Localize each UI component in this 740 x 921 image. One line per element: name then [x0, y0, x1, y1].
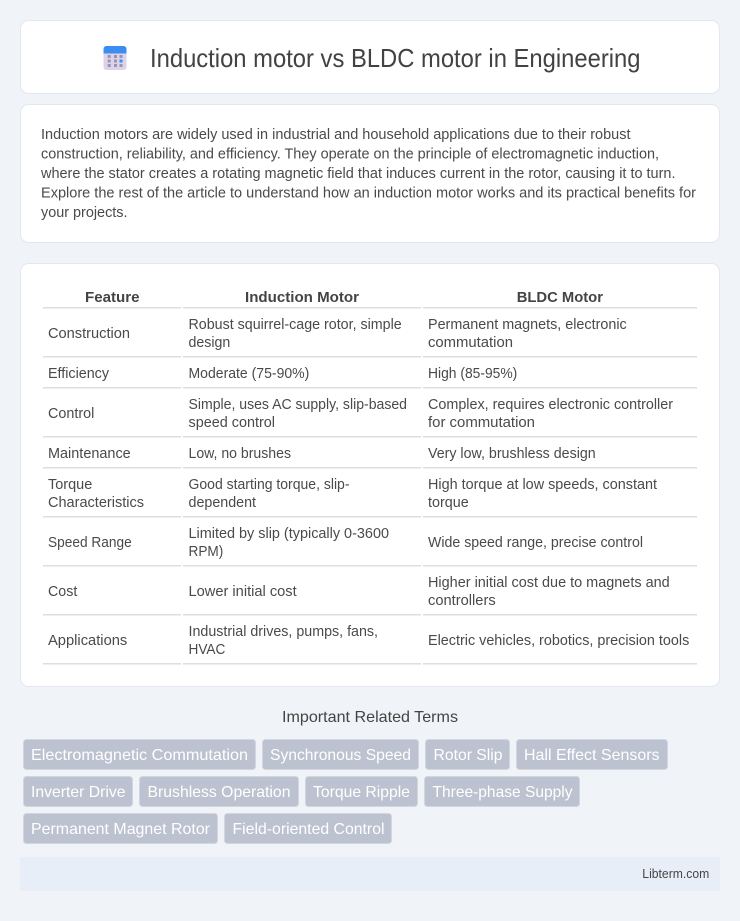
- chip: Electromagnetic Commutation: [24, 740, 256, 770]
- icon: calendar: [104, 46, 126, 70]
- row: speed range: Wide speed range, precise control: [428, 535, 643, 551]
- row: construction: [48, 317, 627, 351]
- row: construction: commutation: [428, 335, 513, 351]
- chip: Synchronous Speed: Synchronous Speed: [270, 747, 411, 764]
- title: Induction motor vs BLDC motor in Engineering: [150, 45, 640, 73]
- row: applications: Electric vehicles, robotics, precision tools: [428, 633, 689, 649]
- heading: important related terms: Important Related Terms: [282, 709, 458, 726]
- related term chips: [24, 740, 668, 844]
- intro paragraph: where the stator creates a rotating magnetic field that induces current in the rotor, causing it to turn.: [40, 166, 675, 182]
- chip: Field-oriented Control: [224, 814, 392, 844]
- row: torque characteristics: dependent: [188, 495, 256, 511]
- chip: Hall Effect Sensors: Hall Effect Sensors: [524, 747, 660, 764]
- table header: BLDC Motor: [517, 289, 603, 306]
- chip: Torque Ripple: [306, 776, 418, 806]
- row: torque characteristics: High torque at low speeds, constant: [428, 477, 657, 493]
- chip: Three-phase Supply: [424, 776, 580, 806]
- chip: Brushless Operation: Brushless Operation: [148, 784, 290, 801]
- row: control: [48, 397, 673, 431]
- row: speed range: [48, 526, 643, 560]
- chip: Three-phase Supply: Three-phase Supply: [432, 784, 572, 801]
- row: control: Simple, uses AC supply, slip-based: [188, 397, 407, 413]
- chip: Field-oriented Control: Field-oriented Control: [232, 821, 384, 838]
- row: efficiency: [48, 366, 517, 382]
- row: speed range: RPM): [188, 544, 223, 560]
- row: maintenance: Very low, brushless design: [428, 446, 596, 462]
- row: applications: [48, 624, 689, 658]
- footer: [20, 857, 720, 891]
- row: cost: controllers: [428, 593, 496, 609]
- row: maintenance: Maintenance: [48, 446, 131, 462]
- row: torque characteristics: Torque: [48, 477, 92, 493]
- chip: Electromagnetic Commutation: Electromagnetic Commutation: [31, 747, 248, 764]
- footer credit: Libterm.com: [642, 866, 709, 881]
- row: applications: Industrial drives, pumps, fans,: [188, 624, 378, 640]
- intro paragraph: Explore the rest of the article to understand how an induction motor works and its practical benefits for: [41, 186, 696, 202]
- table header: [85, 289, 603, 306]
- row: applications: Applications: [48, 633, 127, 649]
- row: speed range: Speed Range: [48, 534, 132, 551]
- row: efficiency: Efficiency: [48, 366, 110, 382]
- panel: title header: [20, 20, 720, 94]
- panel: comparison table: [20, 264, 720, 686]
- chip: Inverter Drive: [24, 776, 132, 806]
- row: efficiency: Moderate (75-90%): [188, 366, 309, 382]
- row: construction: Robust squirrel-cage rotor, simple: [188, 317, 402, 333]
- row: speed range: Limited by slip (typically 0-3600: [188, 526, 389, 542]
- intro paragraph: Induction motors are widely used in industrial and household applications due to their robust: [41, 127, 630, 143]
- chip: Hall Effect Sensors: [516, 740, 668, 770]
- row: cost: [48, 575, 670, 609]
- row: torque characteristics: Characteristics: [48, 495, 144, 511]
- row: construction: Permanent magnets, electronic: [428, 317, 627, 333]
- chip: Rotor Slip: [426, 740, 510, 770]
- row: torque characteristics: [48, 477, 657, 511]
- row: cost: Cost: [48, 584, 77, 600]
- row: torque characteristics: Good starting torque, slip-: [188, 477, 350, 493]
- table header: Induction Motor: [245, 289, 359, 306]
- chip: Permanent Magnet Rotor: Permanent Magnet Rotor: [31, 821, 211, 838]
- intro paragraph: [40, 127, 696, 221]
- chip: Brushless Operation: [140, 776, 298, 806]
- row: construction: design: [188, 335, 230, 351]
- row: maintenance: Low, no brushes: [188, 446, 291, 462]
- row: control: speed control: [188, 415, 275, 431]
- intro paragraph: construction, reliability, and efficiency. They operate on the principle of electromagnetic induction,: [41, 146, 659, 162]
- chip: Rotor Slip: Rotor Slip: [434, 747, 503, 764]
- intro paragraph: your projects.: [41, 205, 127, 221]
- row: construction: Construction: [48, 326, 130, 342]
- chip: Torque Ripple: Torque Ripple: [313, 784, 410, 801]
- row: cost: Higher initial cost due to magnets and: [428, 575, 670, 591]
- row: efficiency: High (85-95%): [428, 366, 517, 382]
- row: control: Complex, requires electronic controller: [428, 397, 673, 413]
- row: torque characteristics: torque: [428, 495, 469, 511]
- table header: Feature: [85, 289, 140, 306]
- row: control: for commutation: [428, 415, 535, 431]
- chip: Permanent Magnet Rotor: [24, 814, 218, 844]
- chip: Inverter Drive: Inverter Drive: [31, 784, 126, 801]
- row: applications: HVAC: [188, 642, 225, 658]
- chip: Synchronous Speed: [262, 740, 418, 770]
- row: control: Control: [48, 406, 94, 422]
- row: cost: Lower initial cost: [188, 584, 297, 600]
- panel: introduction: [20, 104, 720, 242]
- row: maintenance: [48, 446, 596, 462]
